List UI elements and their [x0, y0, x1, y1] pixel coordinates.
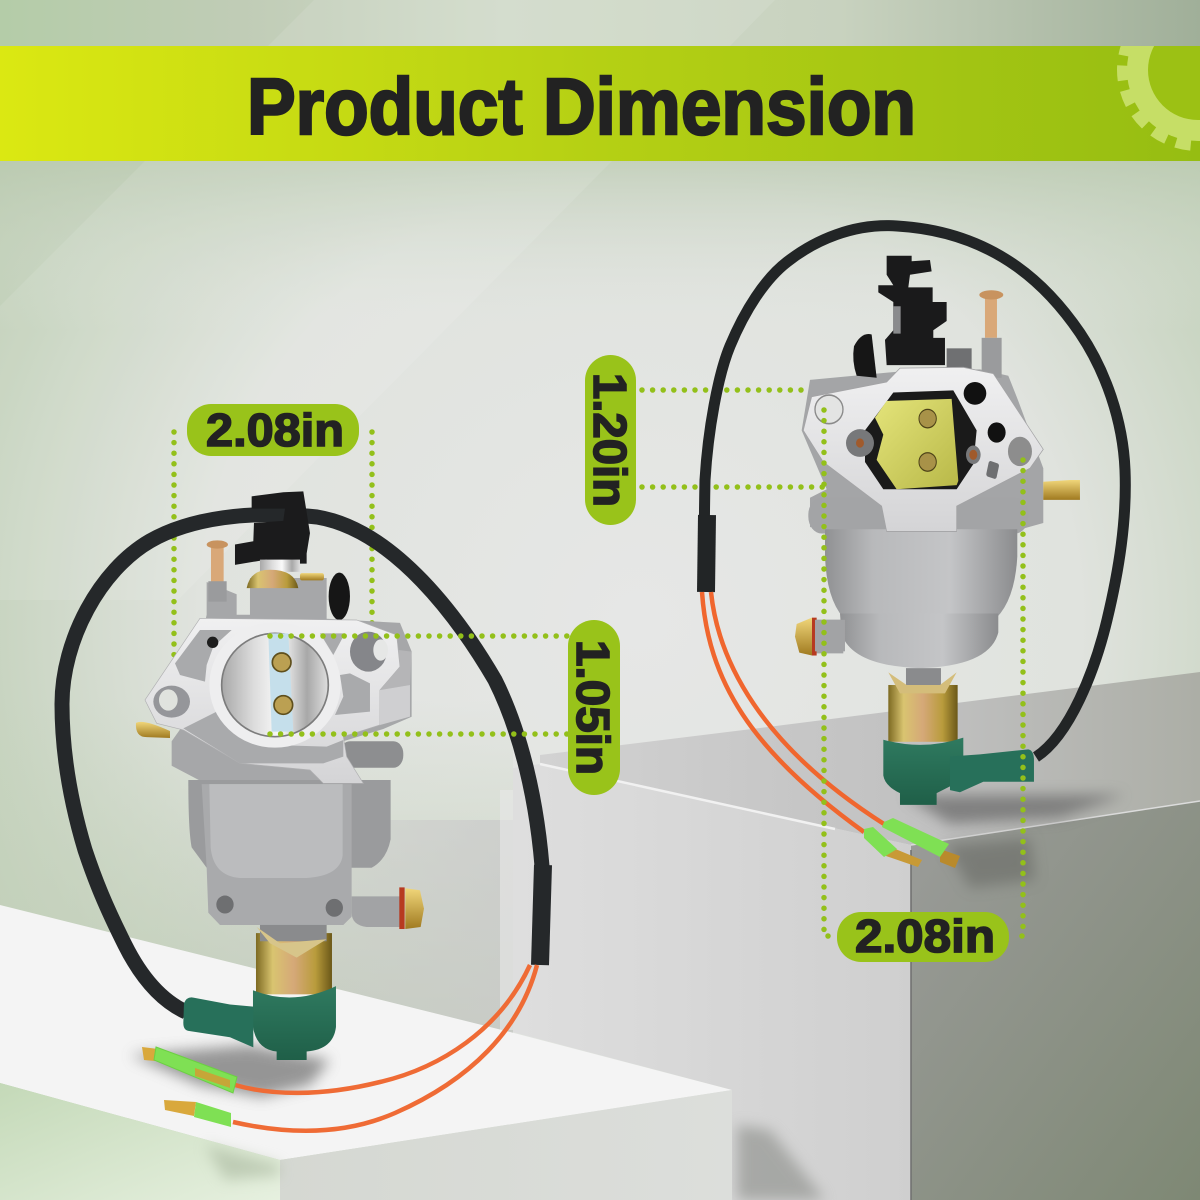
casting	[802, 369, 1043, 531]
icon: gear	[1117, 46, 1200, 151]
shadow: right carburetor	[905, 795, 1125, 824]
bowl mount	[202, 784, 352, 925]
plate	[803, 367, 1043, 531]
right carburetor	[795, 256, 1080, 805]
bowl	[825, 529, 1017, 618]
black knob	[853, 334, 877, 378]
connector two: right	[864, 827, 922, 867]
green cap	[883, 738, 963, 805]
left black wire	[62, 515, 543, 1012]
bowl base	[840, 613, 998, 668]
dimension lines: left height	[270, 636, 570, 734]
brass nipple	[1043, 480, 1080, 500]
left carburetor	[136, 491, 424, 1060]
bowl	[188, 780, 391, 868]
yellow plate	[875, 399, 958, 489]
small hole	[207, 637, 218, 648]
connector two: left	[164, 1100, 231, 1127]
choke stem	[893, 306, 901, 334]
solenoid	[256, 925, 332, 994]
bowl rim	[340, 741, 403, 768]
gold screw	[300, 573, 324, 580]
left hole opening	[159, 689, 178, 711]
black choke	[878, 256, 947, 365]
bowl front	[209, 784, 343, 878]
throttle strap	[268, 633, 293, 732]
screws	[272, 653, 293, 714]
gasket window	[865, 390, 977, 489]
shadow: left carburetor	[130, 1045, 330, 1097]
pedestal blocks	[0, 672, 1200, 1200]
green boot	[183, 997, 253, 1047]
choke shaft	[260, 560, 300, 572]
brass nipple	[136, 722, 170, 738]
label: right height: 1.20in	[584, 373, 636, 507]
connector one: right	[882, 818, 960, 868]
copper pin	[207, 540, 228, 602]
bracket	[947, 348, 972, 374]
red wires: left	[233, 965, 537, 1131]
gold collar	[247, 570, 298, 588]
banner	[0, 46, 1200, 161]
plug boss	[815, 620, 845, 651]
bore ring	[209, 622, 341, 748]
left hole	[153, 686, 190, 718]
green cap	[253, 986, 336, 1060]
solenoid	[888, 668, 958, 742]
drain plug	[795, 618, 843, 656]
left plate	[145, 618, 412, 783]
side castings	[380, 650, 412, 690]
right hole opening	[373, 639, 388, 661]
connector one: left	[142, 1047, 237, 1093]
drain plug	[352, 887, 424, 929]
bowl rim	[808, 498, 1028, 533]
label: top left width: 2.08in	[206, 404, 344, 456]
holes	[815, 382, 1032, 479]
title: Product Dimension	[247, 62, 916, 151]
side casting lower	[380, 685, 410, 725]
screws	[919, 409, 936, 471]
green boot	[950, 749, 1034, 792]
label: bottom right width: 2.08in	[855, 910, 995, 962]
dimension lines: right height	[642, 390, 924, 487]
red wires: right	[702, 592, 884, 832]
pump bosses	[216, 896, 343, 917]
right hole	[350, 632, 387, 672]
throttle bore	[222, 633, 328, 737]
shadow: right connectors	[945, 838, 1035, 888]
dimension lines: left width	[174, 432, 372, 708]
label: left height: 1.05in	[567, 640, 619, 775]
recesses	[175, 630, 370, 763]
right wire	[704, 226, 1125, 757]
black choke	[235, 491, 310, 565]
dimension lines: right width	[824, 410, 1023, 936]
black knob	[329, 573, 350, 620]
casting upper	[172, 578, 412, 784]
copper pin	[979, 290, 1003, 378]
